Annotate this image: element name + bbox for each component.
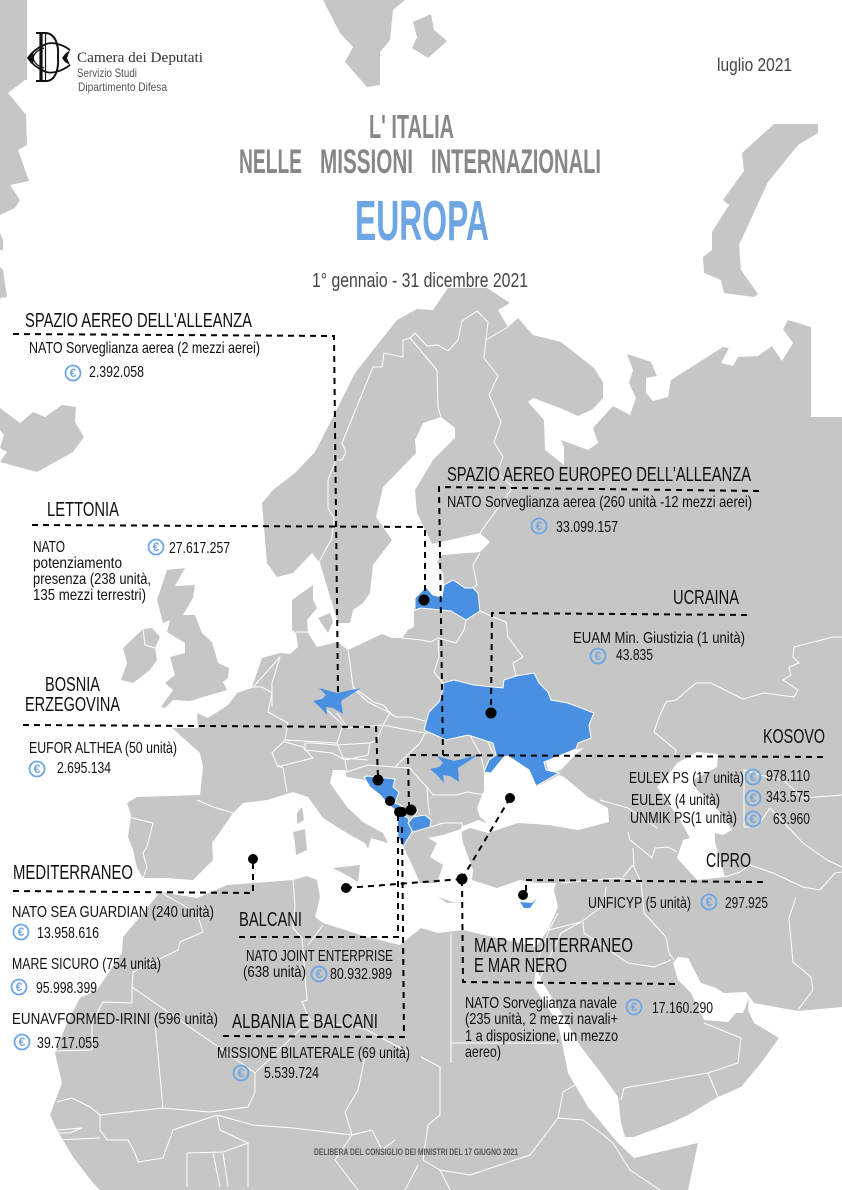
callout: Ucraina [573,587,745,664]
callout: Lettonia: 135 mezzi terrestri) [33,587,146,604]
callout: Spazio aereo dell'Alleanza: NATO Sorveglianza aerea (2 mezzi aerei) [29,340,260,357]
callout: Albania e Balcani: 5.539.724 [264,1065,319,1082]
callout: Kosovo: € [750,812,757,826]
callout: Mediterraneo: 95.998.399 [36,980,97,997]
callout: Balcani [239,909,393,983]
callout: Balcani: 80.932.989 [330,966,392,983]
callout: Mediterraneo: EUNAVFORMED-IRINI (596 unità) [12,1011,218,1028]
callout: Spazio aereo dell'Alleanza [25,310,260,381]
map: seas [140,748,732,947]
callout: Kosovo: 63.960 [773,811,810,828]
callout: Bosnia Erzegovina: ERZEGOVINA [25,694,120,716]
callout: Cipro: € [706,895,713,909]
callout: Mar Mediterraneo e Mar Nero: MAR MEDITERRANEO [474,935,633,957]
subtitle: Europa: EUROPA [355,189,489,253]
callout: Mediterraneo: MARE SICURO (754 unità) [12,956,161,973]
highlighted country: Cyprus [520,898,537,908]
header: institution name [77,50,203,94]
callout: Bosnia Erzegovina: EUFOR ALTHEA (50 unità) [29,740,177,757]
callout: Mediterraneo: € [16,980,23,994]
header: institution name: Dipartimento Difesa [78,80,167,94]
date: luglio 2021 [717,55,792,75]
callout: Balcani: € [316,967,323,981]
callout: Albania e Balcani: ALBANIA E BALCANI [232,1011,378,1033]
callout: Lettonia [33,499,230,604]
callout: Albania e Balcani [217,1011,410,1082]
header: institution name: Servizio Studi [77,66,137,80]
callout: Cipro [588,850,768,912]
callout: Mar Mediterraneo e Mar Nero: 17.160.290 [652,1000,713,1017]
title: INTERNAZIONALI [431,143,601,181]
callout: Lettonia: presenza (238 unità, [33,571,151,588]
callout: Mar Mediterraneo e Mar Nero: 1 a disposizione, un mezzo [465,1028,618,1045]
callout: Spazio aereo dell'Alleanza: SPAZIO AEREO DELL'ALLEANZA [25,310,252,332]
logo: Camera dei Deputati monogram [28,33,70,81]
header: institution name: Camera dei Deputati [77,50,203,66]
callout: Cipro: 297.925 [725,895,768,912]
callout: Mediterraneo: 13.958.616 [37,925,99,942]
callout: Cipro: UNFICYP (5 unità) [588,895,691,912]
callout: Mar Mediterraneo e Mar Nero [465,935,713,1061]
mission location dots [248,594,528,900]
callout: Lettonia: NATO [33,539,65,556]
callout: Spazio aereo dell'Alleanza: € [70,366,77,380]
callout: Ucraina: UCRAINA [673,587,739,609]
callout: Lettonia: potenziamento [33,555,122,572]
callout: Mediterraneo: € [19,1035,26,1049]
title [239,108,601,181]
callout: Ucraina: 43.835 [616,647,653,664]
callout: Kosovo: UNMIK PS(1 unità) [630,810,737,827]
title: MISSIONI [320,143,413,181]
icon: fighter jet over Romania [430,755,478,783]
callout: Spazio aereo europeo dell'Alleanza: NATO Sorveglianza aerea (260 unità -12 mezzi aerei) [447,494,752,511]
map: country borders [53,311,842,1190]
callout: Mediterraneo: 39.717.055 [37,1035,99,1052]
callout: Lettonia: € [153,540,160,554]
title: L' ITALIA [369,108,454,145]
callout: Balcani: BALCANI [239,909,302,931]
callout: Bosnia Erzegovina: € [34,762,41,776]
icon: fighter jet over Germany [313,688,361,715]
map: islands [293,807,470,903]
callout: Lettonia: LETTONIA [47,499,119,521]
footer note: DELIBERA DEL CONSIGLIO DEI MINISTRI DEL 17 GIUGNO 2021 [314,1147,518,1157]
highlighted country: Ukraine [424,673,594,786]
callout: Mediterraneo: NATO SEA GUARDIAN (240 unità) [12,904,214,921]
callout: Bosnia Erzegovina [25,674,177,777]
highlighted country: Latvia [415,580,480,620]
callout: Mar Mediterraneo e Mar Nero: NATO Sorveglianza navale [465,995,617,1012]
callout: Ucraina: € [595,649,602,663]
callout: Spazio aereo europeo dell'Alleanza [447,464,752,536]
callout: Balcani: (638 unità) [243,964,306,981]
callout: Kosovo [629,726,825,828]
callout: Lettonia: 27.617.257 [169,540,230,557]
callout: Spazio aereo dell'Alleanza: 2.392.058 [89,364,144,381]
callout: Albania e Balcani: € [238,1066,245,1080]
callout: Kosovo: EULEX (4 unità) [631,792,720,809]
callout: Kosovo: € [750,791,757,805]
highlighted countries: Balkans [364,776,431,847]
callout: Mar Mediterraneo e Mar Nero: (235 unità, 2 mezzi navali+ [465,1011,618,1028]
period: 1° gennaio - 31 dicembre 2021 [312,270,528,292]
callout: Mar Mediterraneo e Mar Nero: aereo) [465,1044,501,1061]
callout: Mediterraneo: MEDITERRANEO [13,862,133,884]
callout: Mediterraneo [12,862,218,1052]
callout: Spazio aereo europeo dell'Alleanza: € [536,519,543,533]
callout: Kosovo: EULEX PS (17 unità) [629,770,744,787]
callout: Spazio aereo europeo dell'Alleanza: 33.099.157 [556,519,618,536]
callout: Cipro: CIPRO [706,850,751,872]
dashed connector lines [13,334,823,1037]
callout: Albania e Balcani: MISSIONE BILATERALE (69 unità) [217,1045,410,1062]
callout: Mar Mediterraneo e Mar Nero: € [631,1000,638,1014]
callout: Balcani: NATO JOINT ENTERPRISE [246,948,393,965]
callout: Kosovo: € [750,770,757,784]
callout: Bosnia Erzegovina: BOSNIA [45,674,100,696]
callout: Mediterraneo: € [18,925,25,939]
callout: Bosnia Erzegovina: 2.695.134 [57,760,111,777]
callout: Ucraina: EUAM Min. Giustizia (1 unità) [573,630,745,647]
callout: Mar Mediterraneo e Mar Nero: E MAR NERO [474,955,567,977]
title: NELLE [239,143,302,181]
callout: Kosovo: 343.575 [766,789,810,806]
callout: Kosovo: 978.110 [766,768,810,785]
